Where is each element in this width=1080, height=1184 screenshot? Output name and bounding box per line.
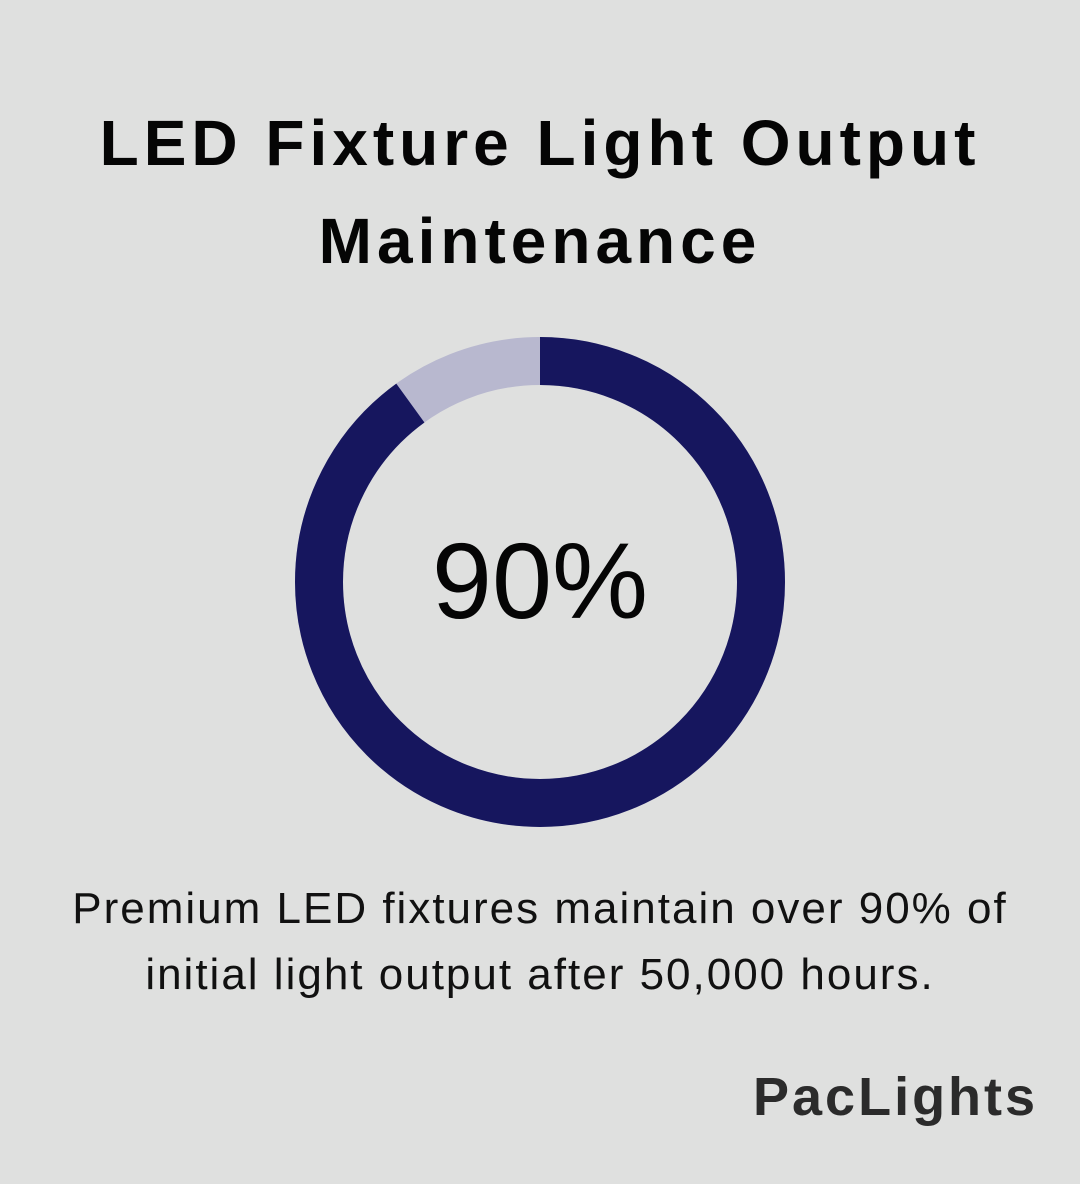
logo: PacLights bbox=[753, 1067, 1038, 1127]
center value: 90% bbox=[432, 520, 648, 641]
title: Maintenance bbox=[319, 205, 761, 277]
caption bbox=[72, 884, 1008, 999]
title: LED Fixture Light Output bbox=[100, 107, 980, 179]
caption: Premium LED fixtures maintain over 90% of bbox=[72, 884, 1008, 933]
segment: 90% maintained bbox=[319, 361, 761, 803]
caption: initial light output after 50,000 hours. bbox=[145, 950, 935, 999]
segment: remaining 10% bbox=[319, 361, 761, 803]
title bbox=[100, 107, 980, 277]
donut chart bbox=[295, 337, 785, 827]
